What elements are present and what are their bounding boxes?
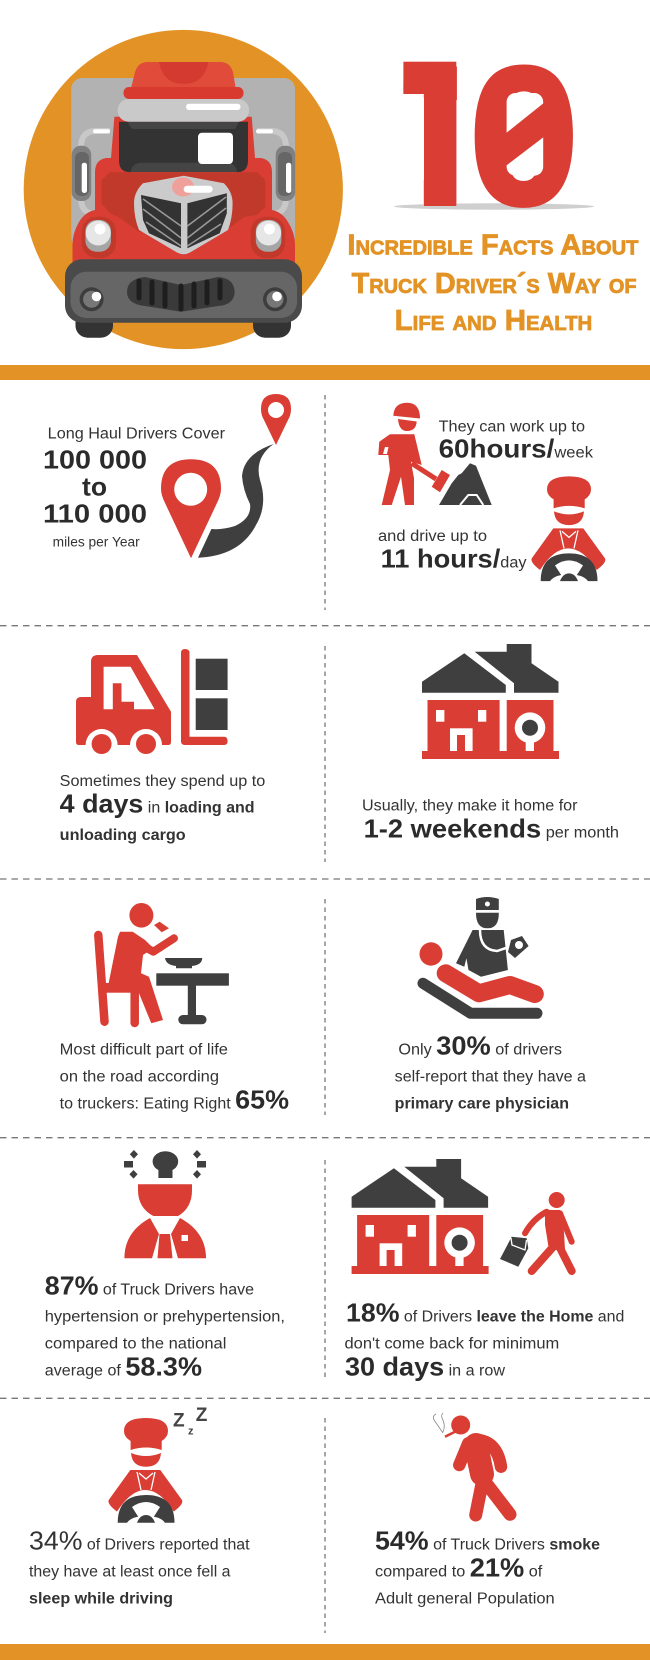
icon: truck driver [531, 476, 605, 581]
text: asleep: 34% of Drivers reported that [29, 1525, 250, 1555]
text: weekends: Usually, they make it home for [362, 798, 578, 815]
panel: primary care physician [395, 897, 586, 1113]
text: smoking: Adult general Population [375, 1591, 555, 1608]
text: eating right: Most difficult part of life [60, 1041, 228, 1058]
text: smoking: compared to 21% of [375, 1553, 543, 1583]
text: work hours: They can work up to [439, 419, 585, 436]
heading number: 10: 1 [382, 28, 490, 245]
icon: truck in orange circle [24, 30, 343, 349]
icon: smoking person [433, 1413, 510, 1515]
text: physician: Only 30% of drivers [398, 1030, 562, 1060]
panel: hypertension [45, 1150, 285, 1382]
text: asleep [29, 1525, 250, 1608]
text: eating right: on the road according [60, 1069, 219, 1086]
text: work hours: 11 hours/ day [381, 543, 527, 573]
title: Life and Health [395, 305, 592, 337]
icon: walking person with bag [500, 1192, 572, 1271]
icon: sleeping driver: Z [196, 1405, 208, 1426]
title [347, 229, 638, 337]
title: Truck Driver´s Way of [352, 268, 637, 300]
icon: person eating at table [98, 903, 229, 1024]
text: weekends [362, 798, 619, 843]
title: Incredible Facts About [347, 229, 638, 261]
text: leaving home: 18% of Drivers leave the Home and [346, 1298, 624, 1328]
text: miles covered: 110 000 [43, 499, 147, 529]
icon: map pins and road [161, 394, 291, 558]
text: leaving home: don't come back for minimum [344, 1336, 559, 1353]
text: work hours: 60hours/ week [439, 433, 593, 463]
text: leaving home [344, 1298, 624, 1382]
text: hypertension: 87% of Truck Drivers have [45, 1271, 254, 1301]
text: physician: self-report that they have a [395, 1069, 586, 1086]
text: hypertension [45, 1271, 285, 1382]
text: days loading: unloading cargo [60, 827, 186, 844]
panel: eating right [60, 903, 289, 1115]
icon: house [352, 1159, 489, 1274]
heading number: 10: 0 [470, 28, 578, 245]
panel: weekends home [362, 644, 619, 843]
text: eating right: to truckers: Eating Right 65% [60, 1085, 289, 1115]
icon: house [422, 644, 559, 759]
bottom orange band [0, 1644, 650, 1660]
text: hypertension: hypertension or prehypertension, [45, 1309, 285, 1326]
text: miles covered: miles per Year [53, 535, 140, 550]
icon: sleeping driver [108, 1405, 208, 1523]
panel: sleep while driving [29, 1405, 250, 1608]
text: physician [395, 1030, 586, 1113]
top orange band [0, 365, 650, 380]
panel: miles per year [43, 394, 291, 558]
text: eating right [60, 1041, 289, 1115]
heading number: 10 [370, 28, 594, 245]
text: days loading: Sometimes they spend up to [60, 773, 265, 790]
icon: sleeping driver: z [188, 1425, 194, 1437]
text: leaving home: 30 days in a row [345, 1352, 506, 1382]
text: miles covered: 100 000 [43, 444, 147, 474]
text: hypertension: average of 58.3% [45, 1352, 202, 1382]
text: smoking: 54% of Truck Drivers smoke [375, 1525, 600, 1555]
text: days loading: 4 days in loading and [60, 789, 255, 819]
icon: stressed person [124, 1150, 206, 1258]
panel: leaving home [344, 1159, 624, 1382]
icon: doctor and patient [420, 897, 537, 1013]
icon: forklift [60, 649, 228, 761]
panel: working hours [378, 403, 605, 581]
text: days loading [60, 773, 265, 844]
text: smoking [375, 1525, 600, 1608]
text: asleep: sleep while driving [29, 1591, 173, 1608]
text: hypertension: compared to the national [45, 1336, 226, 1353]
text: work hours: and drive up to [378, 528, 487, 545]
icon: sleeping driver: Z [173, 1411, 185, 1432]
text: miles covered: to [82, 471, 107, 501]
text: asleep: they have at least once fell a [29, 1564, 231, 1581]
panel: loading cargo [60, 649, 265, 844]
text: physician: primary care physician [395, 1096, 569, 1113]
text: miles covered: Long Haul Drivers Cover [48, 425, 225, 442]
icon: worker with shovel [378, 403, 492, 505]
text: weekends: 1-2 weekends per month [364, 813, 619, 843]
text: miles covered [43, 425, 225, 550]
panel: smoking [375, 1413, 600, 1608]
text: work hours [378, 419, 593, 573]
